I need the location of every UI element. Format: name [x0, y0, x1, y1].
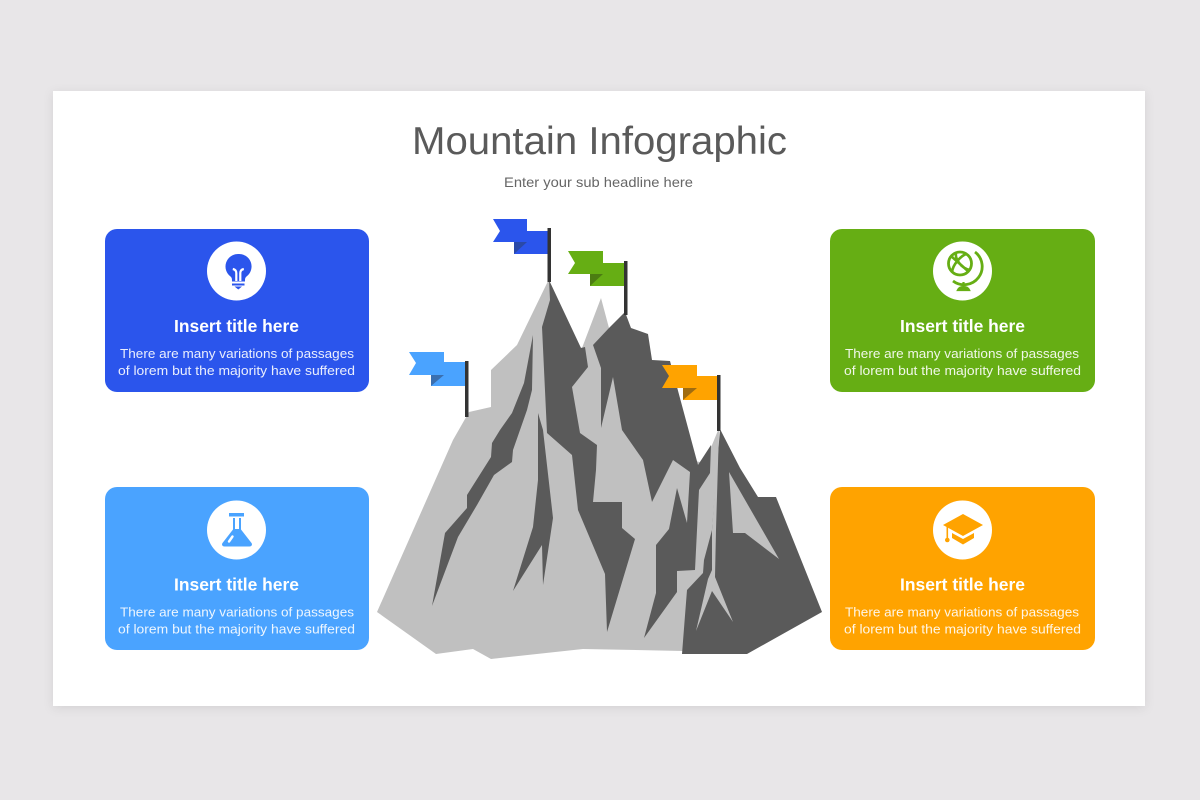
card title: Insert title here: [174, 574, 299, 594]
card body: [118, 604, 355, 636]
icon: light bulb: [207, 242, 266, 300]
flag: blue: [493, 219, 551, 282]
card body: There are many variations of passages: [120, 346, 355, 361]
card body: of lorem but the majority have suffered: [118, 363, 355, 378]
left crack: [432, 335, 533, 606]
icon: flask: [207, 500, 266, 560]
icon: graduation cap: [933, 500, 992, 560]
card body: [118, 346, 355, 378]
card title: Insert title here: [900, 316, 1025, 336]
card body: [844, 346, 1081, 378]
panel: green card: [830, 229, 1095, 392]
subtitle: Enter your sub headline here: [504, 174, 693, 190]
mountain illustration: [377, 279, 822, 659]
card body: There are many variations of passages: [845, 346, 1080, 361]
card body: of lorem but the majority have suffered: [118, 622, 355, 636]
panel: light blue card: [105, 487, 369, 650]
card title: Insert title here: [900, 574, 1025, 594]
light facet on right peak: [729, 472, 779, 559]
card body: of lorem but the majority have suffered: [844, 363, 1081, 378]
white slide panel: [53, 91, 1145, 706]
title: Mountain Infographic: [412, 120, 787, 163]
flag: orange: [662, 365, 720, 431]
mountain dark face: main peak: [542, 280, 635, 632]
mountain light base: [377, 279, 719, 659]
card body: of lorem but the majority have suffered: [844, 622, 1081, 636]
flag: green: [568, 251, 628, 315]
icon: globe: [933, 242, 992, 300]
mountain dark face: middle peak: [593, 312, 711, 638]
card body: There are many variations of passages: [845, 604, 1080, 620]
card body: [844, 604, 1081, 636]
light ridge on right peak: [696, 430, 733, 631]
flag: light blue: [409, 352, 468, 417]
card body: There are many variations of passages: [120, 604, 355, 620]
panel: orange card: [830, 487, 1095, 650]
mountain dark face: right peak: [682, 429, 822, 654]
centre crack: [513, 413, 553, 591]
card title: Insert title here: [174, 316, 299, 336]
panel: blue card: [105, 229, 369, 392]
